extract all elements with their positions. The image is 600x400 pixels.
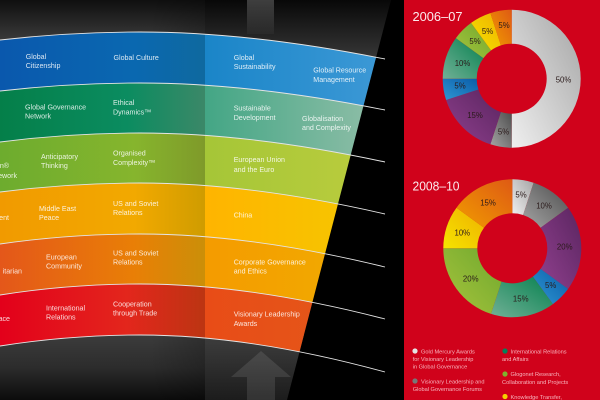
legend item: Glogonet Research: Collaboration and Projects: [502, 380, 568, 386]
label: Cooperation through Trade: Cooperation: [113, 300, 152, 308]
band: green: [0, 84, 364, 155]
donut labels: 2008-10: 15%: [513, 294, 529, 304]
label: Global Citizenship: Global: [26, 53, 46, 61]
band: orange: [0, 234, 325, 302]
label: clipped network: n®: [0, 162, 10, 170]
label: Corporate Governance and Ethics: and Ethics: [234, 268, 267, 276]
label: US and Soviet Relations: US and Soviet: [113, 200, 158, 208]
label: Global Resource Management: Global Resource: [313, 66, 366, 74]
label: Anticipatory Thinking: Thinking: [41, 162, 68, 170]
label: Cooperation through Trade: through Trade: [113, 310, 157, 318]
donut labels: 2008-10: 15%: [480, 198, 496, 208]
dark upper backdrop left: [0, 0, 205, 42]
legend item: Gold Mercury Awards: in Global Governance: [413, 364, 467, 370]
donut labels: 2008-10: 5%: [545, 281, 556, 290]
heading: 2006-07: 2006–07: [412, 10, 462, 24]
label: Ethical Dynamics: Ethical: [113, 99, 134, 107]
donut labels: 2006-07: 5%: [469, 37, 481, 46]
legend: [412, 348, 568, 400]
arrow bottom: [231, 351, 291, 400]
band: yellow: [0, 184, 338, 254]
label: European Union and the Euro: and the Euro: [234, 166, 274, 174]
arc lines: [0, 32, 385, 372]
label: China: China: [234, 212, 252, 220]
label: Global Resource Management: Management: [313, 76, 355, 84]
donut labels: 2008-10: 5%: [515, 190, 527, 200]
legend item: International Relations: [502, 348, 567, 363]
label: Globalisation and Complexity: Globalisation: [302, 115, 343, 123]
dark lower backdrop left: [0, 335, 205, 400]
donut labels: 2006-07: 5%: [482, 27, 493, 36]
label: Global Culture: Global Culture: [114, 54, 159, 62]
label: Ethical Dynamics: Dynamics™: [113, 108, 151, 116]
label: Visionary Leadership Awards: Visionary Leadership: [234, 311, 300, 319]
donut labels: 2006-07: 5%: [454, 82, 466, 90]
fan panel: [0, 0, 391, 400]
legend item: Gold Mercury Awards: [412, 348, 475, 370]
dark upper backdrop right: [205, 0, 391, 60]
column shading: [190, 26, 205, 369]
label: International Relations: Relations: [46, 314, 76, 322]
legend item: Gold Mercury Awards: Gold Mercury Awards: [421, 349, 475, 355]
dark lower backdrop right: [205, 335, 304, 400]
donut labels: 2006-07: 10%: [455, 59, 470, 68]
band: red: [0, 284, 312, 352]
band: lime: [0, 134, 350, 204]
label: US and Soviet Relations 2: US and Soviet: [113, 250, 158, 258]
label: Sustainable Development: Development: [234, 114, 276, 122]
label: Global Governance Network: Network: [25, 112, 51, 120]
legend item: Visionary Leadership Forums: [412, 378, 485, 393]
donut labels: 2008-10: 10%: [536, 202, 552, 210]
donut chart: 2006-07: [443, 10, 581, 148]
label: Global Sustainability: Sustainability: [234, 63, 276, 71]
donut labels: 2008-10: [454, 190, 573, 304]
donut chart: 2008-10: [443, 179, 581, 317]
label: Globalisation and Complexity: and Complexity: [302, 124, 351, 132]
label: Visionary Leadership Awards: Awards: [234, 320, 258, 328]
legend item: Gold Mercury Awards: for Visionary Leadership: [413, 357, 473, 363]
donut labels: 2008-10: 20%: [463, 274, 479, 284]
label: clipped itarian: itarian: [3, 268, 22, 276]
legend item: Visionary Leadership Forums: Global Governance Forums: [413, 387, 482, 393]
legend item: Glogonet Research: [502, 371, 568, 386]
label: Organised Complexity: Organised: [113, 150, 146, 158]
label: Global Governance Network: Global Governance: [25, 104, 86, 112]
arrow stem top: [247, 0, 274, 34]
donut labels: 2006-07: 5%: [498, 21, 510, 30]
label: Global Sustainability: Global: [234, 54, 254, 62]
label: European Community: Community: [46, 262, 82, 270]
donut labels: 2006-07: 5%: [498, 128, 509, 136]
heading: 2008-10: 2008–10: [412, 180, 460, 194]
label: Organised Complexity: Complexity™: [113, 159, 155, 167]
legend item: Visionary Leadership Forums: Visionary Leadership and: [421, 380, 485, 386]
label: Middle East Peace: Peace: [39, 214, 59, 222]
panel: red sidebar: [404, 0, 600, 400]
band labels: [0, 53, 366, 328]
label: European Union and the Euro: European Union: [234, 156, 285, 164]
label: US and Soviet Relations 2: Relations: [113, 259, 143, 267]
donut labels: 2006-07: [454, 21, 571, 136]
label: Sustainable Development: Sustainable: [234, 104, 271, 112]
label: US and Soviet Relations: Relations: [113, 209, 143, 217]
label: Global Citizenship: Citizenship: [26, 62, 60, 70]
label: Corporate Governance and Ethics: Corporate Governance: [234, 258, 306, 266]
label: Anticipatory Thinking: Anticipatory: [41, 153, 78, 161]
donut labels: 2008-10: 20%: [557, 242, 573, 252]
donut labels: 2006-07: 50%: [556, 76, 571, 84]
donut labels: 2006-07: 15%: [467, 111, 483, 120]
legend item: International Relations: and Affairs: [502, 357, 529, 363]
legend item: International Relations: International Relations: [510, 349, 567, 355]
label: European Community: European: [46, 254, 77, 262]
legend item: Glogonet Research: Glogonet Research,: [510, 372, 561, 378]
label: Middle East Peace: Middle East: [39, 205, 76, 213]
band: blue: [0, 32, 385, 110]
label: International Relations: International: [46, 304, 85, 312]
donut labels: 2008-10: 10%: [454, 228, 470, 238]
